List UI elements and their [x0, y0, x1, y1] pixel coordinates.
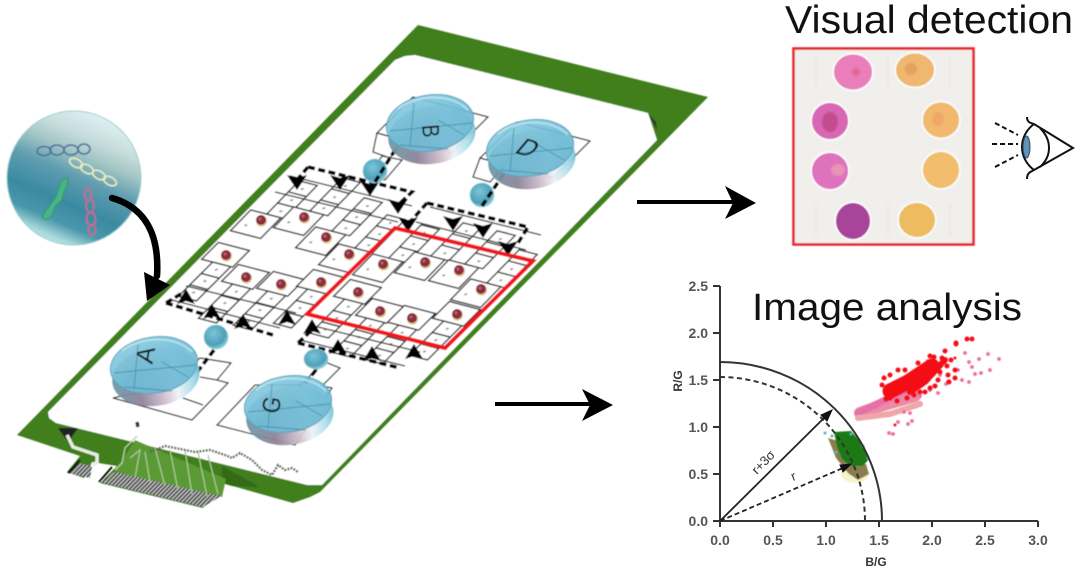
spot details: [822, 63, 944, 176]
x axis labels: 1.5: [869, 532, 889, 548]
reservoir G: [240, 369, 338, 451]
x axis labels: [710, 532, 1048, 548]
arrow: r+3 sigma: [720, 410, 832, 521]
flow arrows: [177, 175, 518, 361]
y axis labels: 0.0: [689, 513, 708, 529]
sight lines: [992, 123, 1018, 167]
connector: hatched contact pads: [68, 440, 226, 507]
axes: [713, 286, 1038, 527]
grid: upper-left test zones: [231, 174, 412, 273]
y axis title: R/G: [671, 370, 685, 392]
panel: paper chip on green circuit board: [17, 25, 708, 508]
y axis labels: 2.5: [689, 278, 708, 294]
x axis labels: 0.0: [710, 532, 730, 548]
green and olive points: [825, 431, 869, 483]
x axis labels: 3.0: [1028, 532, 1048, 548]
red assay dots: [221, 212, 487, 325]
x axis title: B/G: [865, 555, 887, 569]
y axis labels: 1.5: [689, 372, 708, 388]
label r+3 sigma: r+3σ: [748, 447, 778, 477]
y axis labels: 2.0: [689, 325, 708, 341]
x axis labels: 2.5: [975, 532, 995, 548]
DNA: yellow: [68, 156, 118, 188]
pink points: [858, 353, 999, 434]
label r: r: [789, 468, 799, 484]
icon: sphere containing DNA strands: [7, 111, 141, 245]
DNA: pink: [84, 188, 96, 235]
dashed distribution channels: [166, 167, 528, 368]
red highlight box: [307, 228, 533, 348]
x axis labels: 0.5: [763, 532, 783, 548]
reservoir D: D: [509, 133, 547, 162]
icon: eye with sight lines: [992, 117, 1073, 179]
red points: [882, 339, 972, 425]
connector: traces and wiring: [58, 422, 298, 496]
y axis labels: 1.0: [689, 419, 708, 435]
grid: right test zones: [353, 207, 541, 308]
DNA: blue: [37, 144, 90, 156]
board: green substrate: [17, 25, 708, 508]
reservoir D: [482, 113, 580, 195]
orange test zones: [895, 52, 960, 238]
x axis labels: 2.0: [922, 532, 942, 548]
reservoir A: A: [131, 344, 161, 366]
small droplets: [204, 159, 494, 369]
reservoir G: G: [256, 394, 287, 415]
heading: Image analysis: Image analysis: [752, 287, 1022, 329]
iris: [1023, 136, 1030, 158]
panel: photo of coloured test zones: [794, 48, 974, 244]
arrow: chip to visual detection: [637, 186, 756, 219]
paper: white sheet: [48, 55, 657, 485]
photo background lines: [816, 56, 950, 236]
scatter chart: [671, 278, 1048, 569]
y axis labels: [689, 278, 708, 529]
darker board shading beside connector: [222, 466, 260, 487]
dashed stems from reservoirs through droplets: [195, 150, 505, 392]
heading: Visual detection: Visual detection: [785, 0, 1073, 42]
x axis labels: 1.0: [816, 532, 836, 548]
threshold curve r: [720, 377, 865, 521]
threshold curve r+3 sigma: [720, 362, 882, 521]
reservoir B: [382, 88, 480, 170]
reservoir B: B: [417, 124, 445, 138]
reservoir A: [106, 330, 204, 412]
grid: lower test zones: [299, 279, 480, 366]
grid: left test zones: [167, 242, 344, 330]
arrow: sample to chip: [112, 198, 170, 301]
pink test zones: [811, 54, 873, 240]
corner notch marker: [648, 113, 657, 130]
grid: reservoir pads and channels: [113, 97, 590, 445]
arrow: r: [720, 464, 851, 521]
DNA: green: [42, 178, 68, 219]
arrow: chip to image analysis: [495, 389, 613, 421]
y axis labels: 0.5: [689, 466, 708, 482]
eye outline: [1022, 117, 1073, 179]
